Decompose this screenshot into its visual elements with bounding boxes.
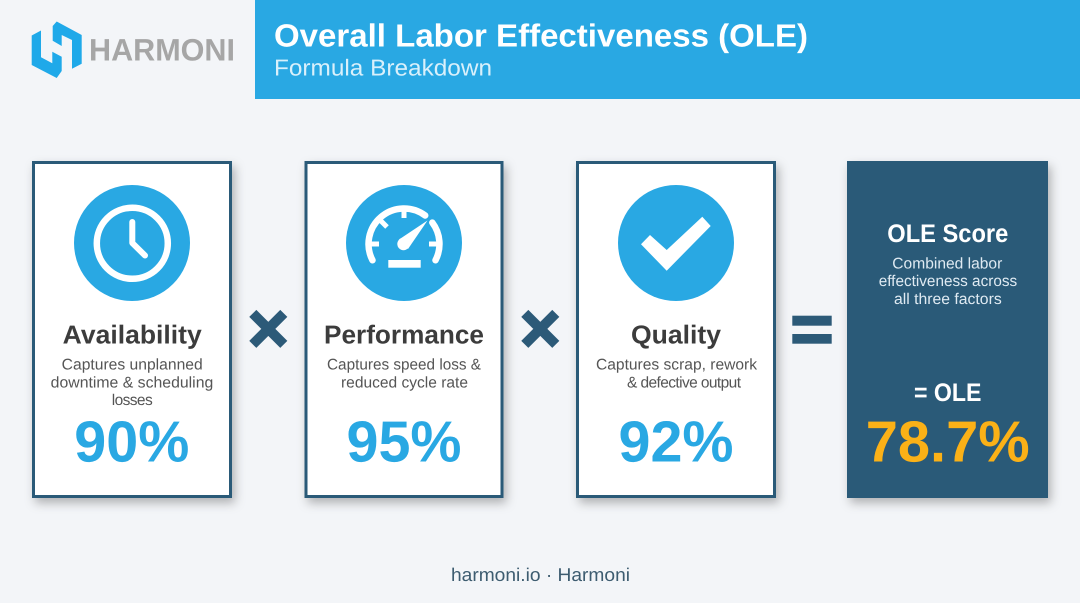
panel: performance xyxy=(306,162,502,496)
heading: OLE score: OLE Score xyxy=(887,220,1008,248)
footer: harmoni.io · Harmoni xyxy=(451,564,630,585)
logo wordmark: HARMONI xyxy=(89,33,235,68)
description: OLE score: Combined labor xyxy=(892,255,1002,272)
panel: availability xyxy=(34,162,230,496)
description: availability: Captures unplanned xyxy=(62,356,203,373)
heading: availability: Availability xyxy=(63,319,202,349)
description: OLE score: effectiveness across xyxy=(879,273,1017,290)
icon: hexagonal H mark xyxy=(32,22,82,78)
logo: Harmoni xyxy=(32,22,235,78)
description: quality: & defective output xyxy=(627,374,742,391)
description: availability xyxy=(51,356,213,409)
heading: performance: Performance xyxy=(324,319,484,349)
subtitle: Formula Breakdown xyxy=(274,55,492,81)
value: 92%: 92% xyxy=(618,410,734,475)
value: 95%: 95% xyxy=(346,410,462,475)
description: OLE score xyxy=(879,255,1017,308)
value: 78.7%: 78.7% xyxy=(866,410,1030,475)
title: Overall Labor Effectiveness (OLE) xyxy=(274,18,808,54)
operator: equals xyxy=(792,316,832,344)
description: availability: losses xyxy=(112,392,153,409)
description: quality: Captures scrap, rework xyxy=(596,356,757,373)
panel: quality xyxy=(578,162,774,496)
icon: clock xyxy=(74,185,190,301)
description: quality xyxy=(596,356,757,391)
panel: OLE score xyxy=(847,161,1048,498)
heading: quality: Quality xyxy=(631,319,722,349)
description: performance: Captures speed loss & xyxy=(327,356,482,373)
operator: multiply xyxy=(525,313,556,344)
icon: speedometer xyxy=(346,185,462,301)
operator: multiply xyxy=(253,313,284,344)
description: availability: downtime & scheduling xyxy=(51,374,213,391)
value: 90%: 90% xyxy=(74,410,189,475)
header banner xyxy=(255,0,1080,99)
label: = OLE: = OLE xyxy=(914,379,982,407)
description: OLE score: all three factors xyxy=(894,291,1002,308)
description: performance: reduced cycle rate xyxy=(341,374,468,391)
description: performance xyxy=(327,356,482,391)
icon: check mark xyxy=(618,185,734,301)
